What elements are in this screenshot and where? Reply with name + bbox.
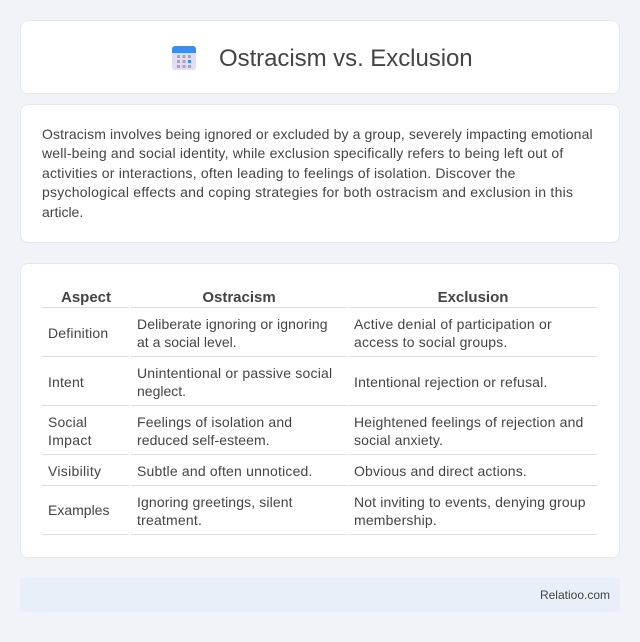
row: examples: Not inviting to events, denying group (354, 494, 586, 510)
intro text: Ostracism involves being ignored or excluded by a group, severely impacting emotional (42, 126, 593, 142)
row: intent: Intentional rejection or refusal. (354, 374, 548, 390)
intro card (20, 104, 620, 243)
row: intent: neglect. (137, 383, 186, 399)
footer credit: Relatioo.com (540, 588, 610, 602)
row: social impact: Feelings of isolation and (137, 414, 292, 430)
table card (20, 263, 620, 558)
row: social impact: social anxiety. (354, 432, 443, 448)
row: definition: access to social groups. (354, 334, 508, 350)
title card (20, 20, 620, 94)
row: definition: Active denial of participation or (354, 316, 552, 332)
row: visibility: Subtle and often unnoticed. (137, 463, 313, 479)
row: intent (48, 365, 548, 399)
row: examples (48, 494, 586, 528)
table header: Aspect (61, 289, 111, 306)
row: social impact: Social (48, 414, 87, 430)
intro text (42, 126, 593, 220)
intro text: well-being and social identity, while exclusion specifically refers to being left out of (42, 145, 563, 161)
row: examples: treatment. (137, 512, 202, 528)
row: definition: Deliberate ignoring or ignoring (137, 316, 328, 332)
row: definition: Definition (48, 325, 108, 341)
row: examples: Examples (48, 502, 109, 518)
footer (20, 578, 620, 612)
title: Ostracism vs. Exclusion (219, 45, 473, 72)
row: definition: at a social level. (137, 334, 237, 350)
row: social impact: Impact (48, 432, 92, 448)
comparison table (42, 289, 597, 535)
intro text: activities or interactions, often leading to feelings of isolation. Discover the (42, 165, 516, 181)
intro text: psychological effects and coping strategies for both ostracism and exclusion in this (42, 184, 573, 200)
table header: Exclusion (438, 289, 508, 306)
row: social impact: Heightened feelings of rejection and (354, 414, 584, 430)
row: intent: Intent (48, 374, 84, 390)
row: visibility (48, 463, 527, 479)
table header (61, 289, 508, 306)
row: visibility: Obvious and direct actions. (354, 463, 527, 479)
row: social impact (48, 414, 584, 448)
icon: calendar (172, 46, 196, 70)
table header: Ostracism (202, 289, 276, 306)
row: social impact: reduced self-esteem. (137, 432, 270, 448)
row: examples: membership. (354, 512, 437, 528)
row: examples: Ignoring greetings, silent (137, 494, 293, 510)
row: visibility: Visibility (48, 463, 101, 479)
intro text: article. (42, 204, 83, 220)
row: intent: Unintentional or passive social (137, 365, 332, 381)
row: definition (48, 316, 552, 350)
